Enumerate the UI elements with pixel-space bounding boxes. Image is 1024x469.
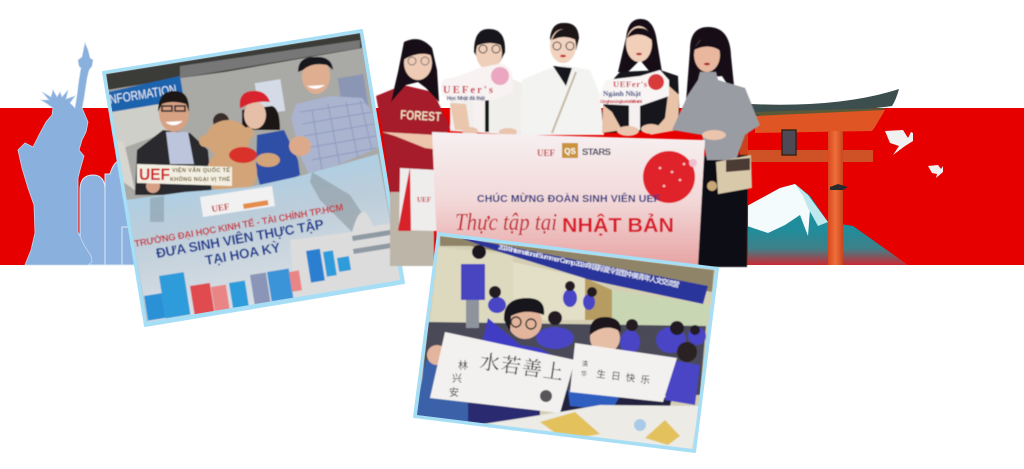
man in plaid shirt	[289, 57, 378, 176]
banner logos: UEF	[537, 148, 556, 158]
photo scene	[410, 230, 720, 455]
UEF placard: VIỆN VĂN QUỐC TẾ	[172, 166, 230, 174]
photo: Japan internship group	[376, 19, 760, 267]
student in red shirt: FOREST	[400, 107, 442, 124]
UEF placard: UEF	[139, 165, 170, 184]
sign: Học Nhật	[441, 64, 513, 132]
photo: calligraphy class	[410, 230, 720, 455]
sign: Ngành Nhật: Ngành Nhật	[603, 89, 642, 98]
torii cross beam	[745, 150, 873, 162]
photo scene	[100, 28, 410, 328]
origami crane large	[885, 130, 913, 155]
sign: Ngành Nhật: UEFer's	[613, 79, 648, 89]
photo frame	[103, 30, 404, 326]
student on right	[665, 342, 700, 405]
hands on banner	[462, 124, 726, 140]
sign: Ngành Nhật: Cùng học cùng bước tới tân trời	[600, 99, 642, 104]
person left edge	[116, 140, 135, 190]
UEF placard: KHÔNG NGẠI VỊ THẾ	[170, 175, 230, 183]
student in white shirt	[520, 23, 604, 135]
torii plaque	[782, 130, 796, 155]
background person	[212, 112, 230, 125]
banner logo: UEF	[211, 201, 231, 214]
UEF placard	[137, 164, 232, 186]
sign: Học Nhật: Học Nhật đã thật	[447, 96, 485, 102]
red sun with blossoms	[643, 151, 697, 203]
dark clothes under sheets	[467, 402, 540, 424]
desks band	[420, 322, 706, 400]
crossbody bag	[707, 155, 752, 194]
student in red shirt	[376, 39, 450, 266]
Mount Fuji	[747, 184, 908, 265]
illustration: Statue of Liberty and skyline	[18, 43, 136, 265]
calligraphy sheet 1: 林	[458, 357, 468, 372]
congratulation text: CHÚC MỪNG ĐOÀN SINH VIÊN UEF	[477, 192, 661, 205]
calligraphy sheet 1	[430, 332, 575, 413]
student with UEFer's sign	[450, 29, 524, 135]
banner logos: QS	[564, 147, 576, 156]
congratulation banner	[432, 132, 705, 266]
calligraphy sheet 2: 生日快乐	[596, 366, 651, 387]
printed banner	[126, 154, 402, 325]
city skyline	[144, 249, 351, 321]
calligraphy sheet 1: 安	[449, 384, 459, 399]
event banner: 2024 International Summer Camp 2024年国际夏令营暨中美青年人文交流营	[498, 242, 680, 289]
man in suit	[135, 91, 212, 195]
printed banner: TẠI HOA KỲ	[204, 240, 281, 268]
torii roof	[750, 89, 899, 118]
girl with red cap	[240, 91, 300, 193]
illustration: torii gate and Mount Fuji	[740, 89, 943, 265]
girl with calligraphy	[590, 317, 621, 353]
torii pillars	[828, 131, 843, 265]
information sign: NFORMATION	[108, 82, 178, 107]
script text: Thực tập tại	[455, 210, 557, 236]
calligraphy sheet 2: 华	[581, 369, 587, 378]
origami crane small	[928, 165, 943, 178]
shopping bag	[398, 167, 437, 231]
lower-left floor	[414, 360, 468, 424]
table with papers	[470, 405, 700, 450]
ceiling	[106, 33, 362, 90]
sign: Ngành Nhật	[598, 70, 669, 130]
banner logos: STARS	[582, 147, 611, 158]
student in black top	[602, 19, 680, 135]
standing student	[461, 245, 486, 328]
photo: USA internship group	[100, 28, 410, 328]
student in grey sweater	[672, 27, 760, 267]
background students	[488, 289, 706, 354]
shopping bag: UEF	[417, 196, 431, 204]
skyline buildings	[80, 160, 136, 265]
red background band	[0, 108, 1024, 265]
teddy bear	[199, 120, 280, 196]
country text: NHẬT BẢN	[562, 213, 674, 237]
event banner	[455, 236, 708, 304]
banner logos	[537, 143, 611, 158]
calligraphy sheet 2	[570, 343, 677, 402]
capitol drawing	[290, 212, 402, 297]
calligraphy sheet 1: 水若善上	[478, 345, 565, 386]
photo frame	[414, 233, 718, 452]
statue silhouette	[18, 43, 93, 265]
sign: Học Nhật: UEFer's	[443, 85, 493, 96]
calligraphy sheet 1: 兴	[452, 370, 462, 385]
calligraphy sheet 2: 清	[582, 359, 588, 368]
boy with calligraphy	[427, 298, 560, 365]
window wall	[430, 247, 513, 325]
printed banner: ĐƯA SINH VIÊN THỰC TẬP	[155, 217, 325, 261]
banner headline: TRƯỜNG ĐẠI HỌC KINH TẾ - TÀI CHÍNH TP.HCM	[133, 201, 344, 250]
ceiling strip	[440, 236, 714, 292]
